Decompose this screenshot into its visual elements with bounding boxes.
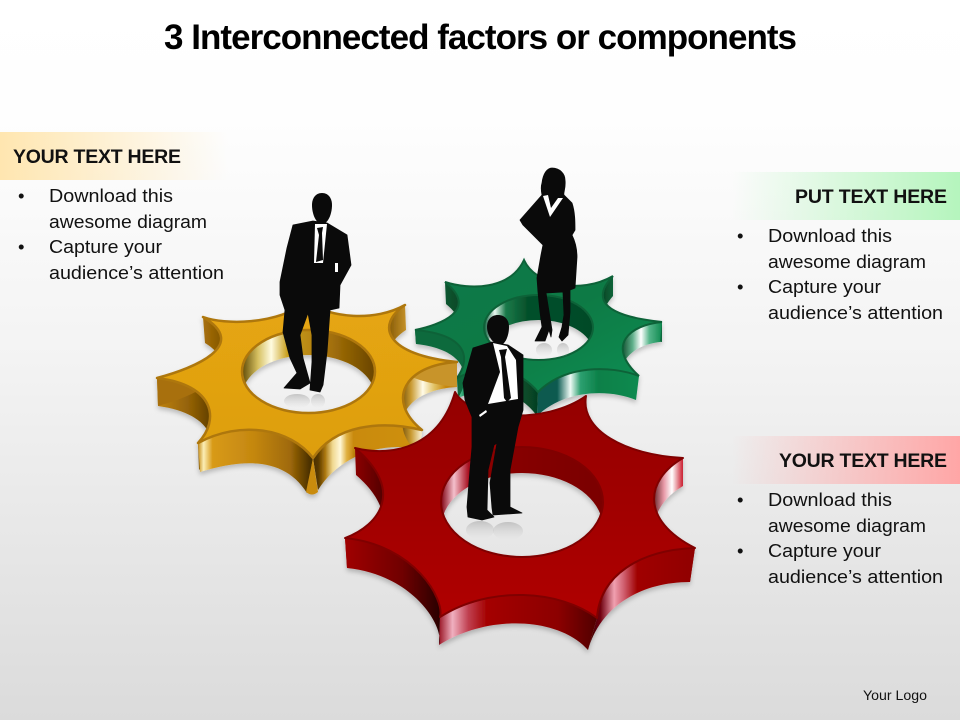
silhouette: businesswoman [520, 168, 577, 341]
yellow gear [157, 302, 457, 494]
panel: put text here (green, right): • [737, 276, 743, 297]
panel: put text here (green, right): Download this [768, 225, 892, 246]
panel: your text here (yellow, left): audience’s attention [49, 262, 224, 283]
red gear [345, 392, 695, 650]
panel: put text here (green, right) [732, 172, 960, 323]
panel: your text here (red, right): • [737, 540, 743, 561]
title: 3 Interconnected factors or components [164, 18, 797, 57]
reflection: man on red gear [466, 521, 523, 540]
panel: your text here (yellow, left): • [18, 236, 24, 257]
panel: your text here (yellow, left): • [18, 185, 24, 206]
panel: your text here (red, right): Capture your [768, 540, 881, 561]
panel: your text here (yellow, left): Download this [49, 185, 173, 206]
panel: your text here (yellow, left): awesome diagram [49, 211, 207, 232]
silhouette: businessman on red gear [463, 315, 523, 520]
panel: put text here (green, right): audience’s attention [768, 302, 943, 323]
panel: your text here (yellow, left) [0, 132, 228, 283]
panel: put text here (green, right): Capture your [768, 276, 881, 297]
reflection: woman [536, 343, 569, 357]
panel: your text here (red, right): Download this [768, 489, 892, 510]
panel: your text here (red, right): awesome diagram [768, 515, 926, 536]
panel: your text here (yellow, left): Capture your [49, 236, 162, 257]
panel: put text here (green, right): awesome diagram [768, 251, 926, 272]
logo text: Your Logo [863, 687, 927, 703]
panel: your text here (red, right): • [737, 489, 743, 510]
panel: put text here (green, right): PUT TEXT HERE [795, 186, 947, 208]
panel: your text here (yellow, left): YOUR TEXT HERE [13, 146, 181, 168]
green gear [415, 260, 662, 416]
silhouette: businessman on yellow gear [280, 193, 351, 392]
panel: put text here (green, right): • [737, 225, 743, 246]
panel: your text here (red, right) [732, 436, 960, 587]
panel: your text here (red, right): audience’s attention [768, 566, 943, 587]
reflection: man on yellow gear [284, 394, 325, 408]
panel: your text here (red, right): YOUR TEXT HERE [779, 450, 947, 472]
